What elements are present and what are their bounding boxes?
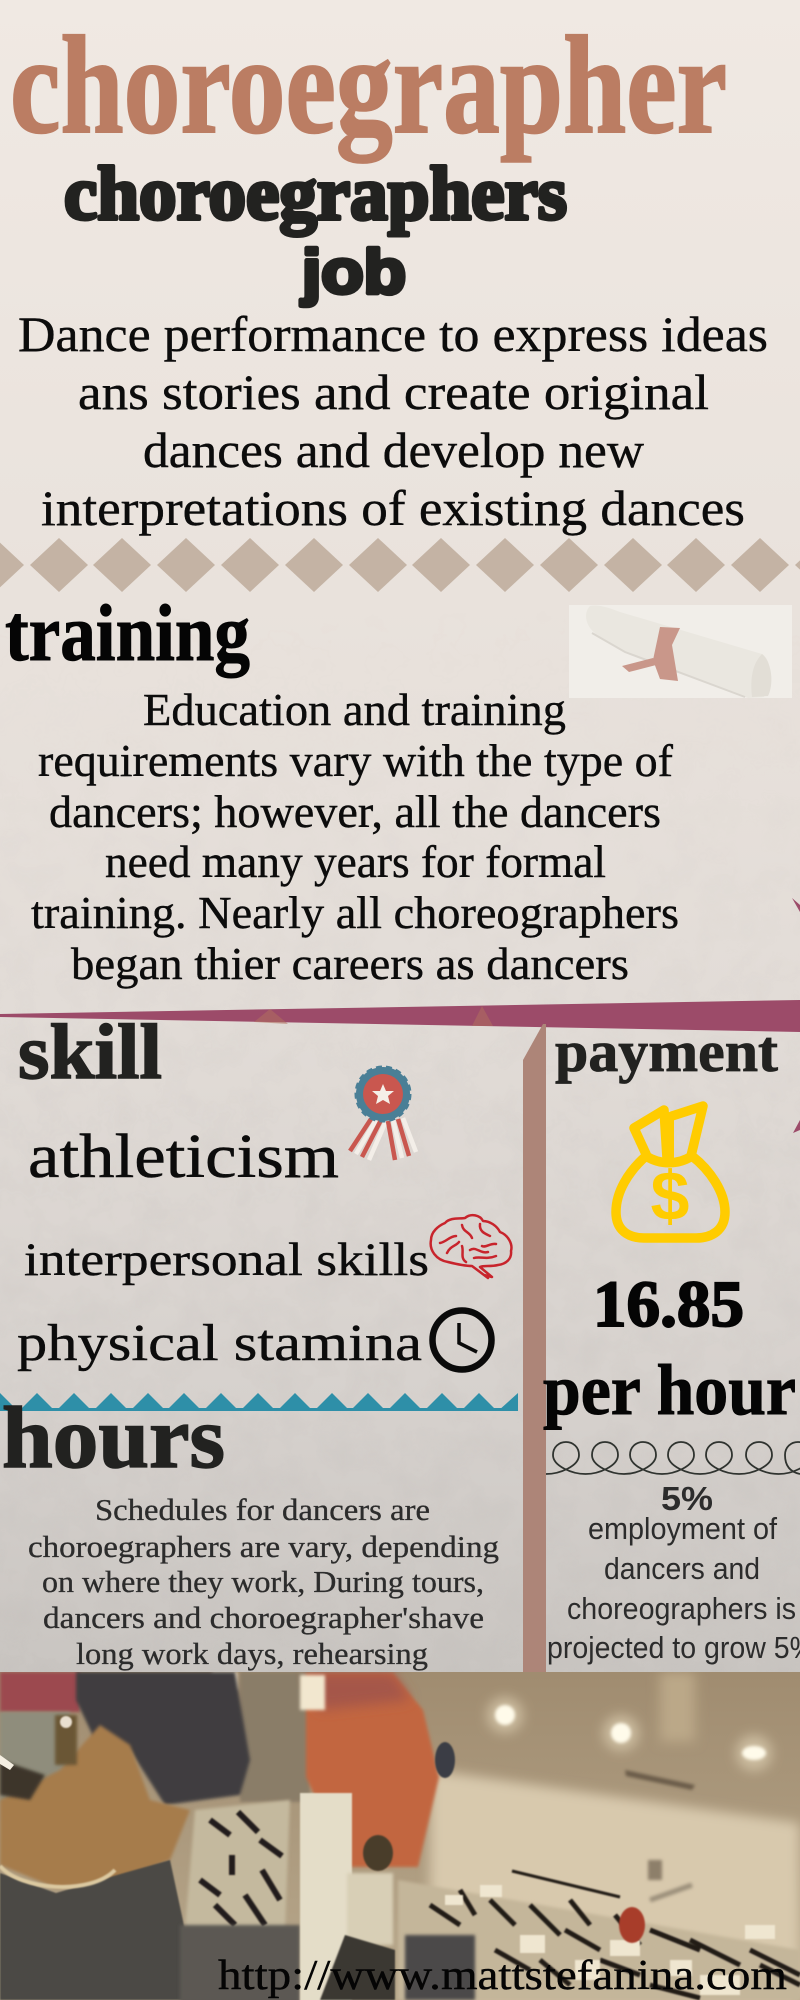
training text block: dancers; however, all the dancers [49,786,661,837]
hours text block: long work days, rehearsing [76,1636,428,1671]
photo: dance rehearsal [0,1672,800,2000]
hours text block: choroegraphers are vary, depending [28,1529,499,1564]
subtitle: choroegraphers: choroegraphers [64,152,567,236]
icon: money bag: $ [651,1157,689,1235]
icon: clock [432,1310,492,1370]
curly loop divider [546,1442,800,1474]
diamond divider [0,538,800,592]
icon: diploma scroll [569,605,792,698]
icon: medal ribbon [350,1067,416,1160]
growth figure: 5% [661,1480,713,1517]
hours text block: on where they work, During tours, [42,1564,484,1599]
intro text block: interpretations of existing dances [41,480,745,536]
intro text block: ans stories and create original [78,364,709,420]
intro text block: dances and develop new [143,422,644,478]
teal triangle divider [0,1393,518,1411]
employment text block: dancers and [604,1551,760,1586]
subtitle: job: job [301,238,406,307]
website url: http://www.mattstefanina.com [218,1953,787,1999]
heading: hours: hours [2,1390,225,1487]
training text block: requirements vary with the type of [38,735,674,786]
pay figure: 16.85 [593,1268,744,1341]
training text block: Education and training [143,684,566,735]
hours text block: dancers and choroegrapher'shave [43,1600,484,1635]
icon: money bag [616,1106,725,1238]
skill: physical stamina: physical stamina [17,1315,422,1372]
training text block [31,684,679,989]
intro text block [18,306,768,536]
skill: athleticism: athleticism [28,1123,339,1191]
employment text block: employment of [588,1511,777,1546]
heading: training: training [5,590,250,678]
intro text block: Dance performance to express ideas [18,306,768,362]
purple diagonal band [0,1000,800,1032]
heading: skill: skill [18,1008,162,1095]
hours text block: Schedules for dancers are [95,1492,430,1527]
training text block: began thier careers as dancers [71,938,629,989]
vertical divider bar [523,1024,546,1672]
small purple accents [792,898,800,1133]
employment text block [547,1511,800,1665]
icon: brain [431,1215,511,1278]
skill: interpersonal skills: interpersonal skills [24,1234,429,1286]
training text block: need many years for formal [105,836,606,887]
training text block: training. Nearly all choreographers [31,887,679,938]
hours text block [28,1492,499,1671]
heading: payment: payment [555,1019,779,1084]
